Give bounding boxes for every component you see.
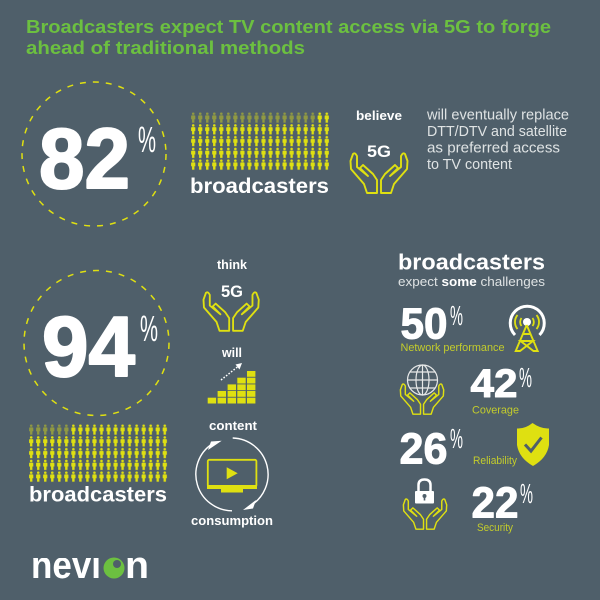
title: Broadcasters expect TV content access via 5G to forge	[26, 16, 551, 37]
icon: rising bar chart with arrow	[208, 363, 255, 404]
stat: 26 percent reliability: %	[450, 423, 463, 454]
title: ahead of traditional methods	[26, 37, 305, 58]
stat: 42 percent coverage	[470, 362, 532, 416]
text block: will eventually replace	[426, 106, 569, 173]
icon: 5G in hands	[203, 282, 259, 331]
title	[26, 16, 551, 58]
text block: will eventually replace: to TV content	[427, 156, 513, 173]
logo: nevion: n	[125, 545, 149, 587]
icon: 5G in hands	[350, 142, 408, 193]
stat: 94 percent in dashed circle	[24, 270, 169, 416]
text block: will eventually replace: as preferred access	[427, 140, 560, 156]
label: think: think	[217, 258, 247, 272]
stat: 50 percent network performance	[400, 300, 504, 354]
stat: 50 percent network performance: %	[450, 300, 463, 331]
people grid: 82 of 100 broadcasters	[191, 112, 329, 171]
heading: broadcasters expect some challenges: expect some challenges	[398, 274, 546, 289]
stat: 22 percent security	[472, 478, 533, 534]
stat: 22 percent security: %	[520, 478, 533, 509]
stat: 26 percent reliability	[400, 423, 517, 474]
stat: 82 percent in dashed circle	[22, 82, 166, 226]
icon: shield with check	[517, 423, 549, 466]
label: broadcasters: broadcasters	[190, 175, 329, 198]
logo: nevion: nevi	[31, 545, 101, 587]
stat: 22 percent security: Security	[477, 522, 513, 534]
people grid: 94 of 100 broadcasters	[29, 424, 168, 483]
icon: TV with content cycle arrows	[196, 438, 268, 511]
text block: will eventually replace: DTT/DTV and satellite	[427, 123, 567, 140]
heading: broadcasters expect some challenges: broadcasters	[398, 250, 545, 274]
stat: 82 percent in dashed circle: 82	[39, 112, 130, 207]
label: broadcasters: broadcasters	[29, 484, 167, 506]
stat: 22 percent security: 22	[472, 478, 518, 528]
label: will: will	[221, 346, 242, 360]
icon: 5G in hands: 5G	[221, 282, 243, 301]
label: believe: believe	[356, 109, 402, 123]
logo: nevion	[33, 558, 147, 578]
stat: 94 percent in dashed circle: 94	[42, 300, 135, 395]
label: consumption: consumption	[191, 513, 273, 528]
stat: 50 percent network performance: Network performance	[400, 342, 504, 354]
label: content: content	[209, 418, 258, 433]
stat: 42 percent coverage: 42	[470, 362, 518, 406]
stat: 82 percent in dashed circle: %	[138, 119, 156, 160]
icon: globe in hands	[400, 365, 444, 414]
icon: signal tower and gauge	[510, 306, 544, 351]
icon: padlock in hands	[403, 480, 447, 529]
stat: 42 percent coverage: %	[519, 362, 532, 393]
icon: 5G in hands: 5G	[367, 142, 391, 161]
text block: will eventually replace: will eventually replace	[426, 106, 569, 124]
stat: 94 percent in dashed circle: %	[140, 308, 158, 349]
heading: broadcasters expect some challenges	[398, 250, 546, 289]
stat: 26 percent reliability: Reliability	[473, 455, 517, 467]
stat: 50 percent network performance: 50	[400, 300, 448, 348]
stat: 42 percent coverage: Coverage	[472, 404, 519, 416]
stat: 26 percent reliability: 26	[400, 424, 448, 474]
